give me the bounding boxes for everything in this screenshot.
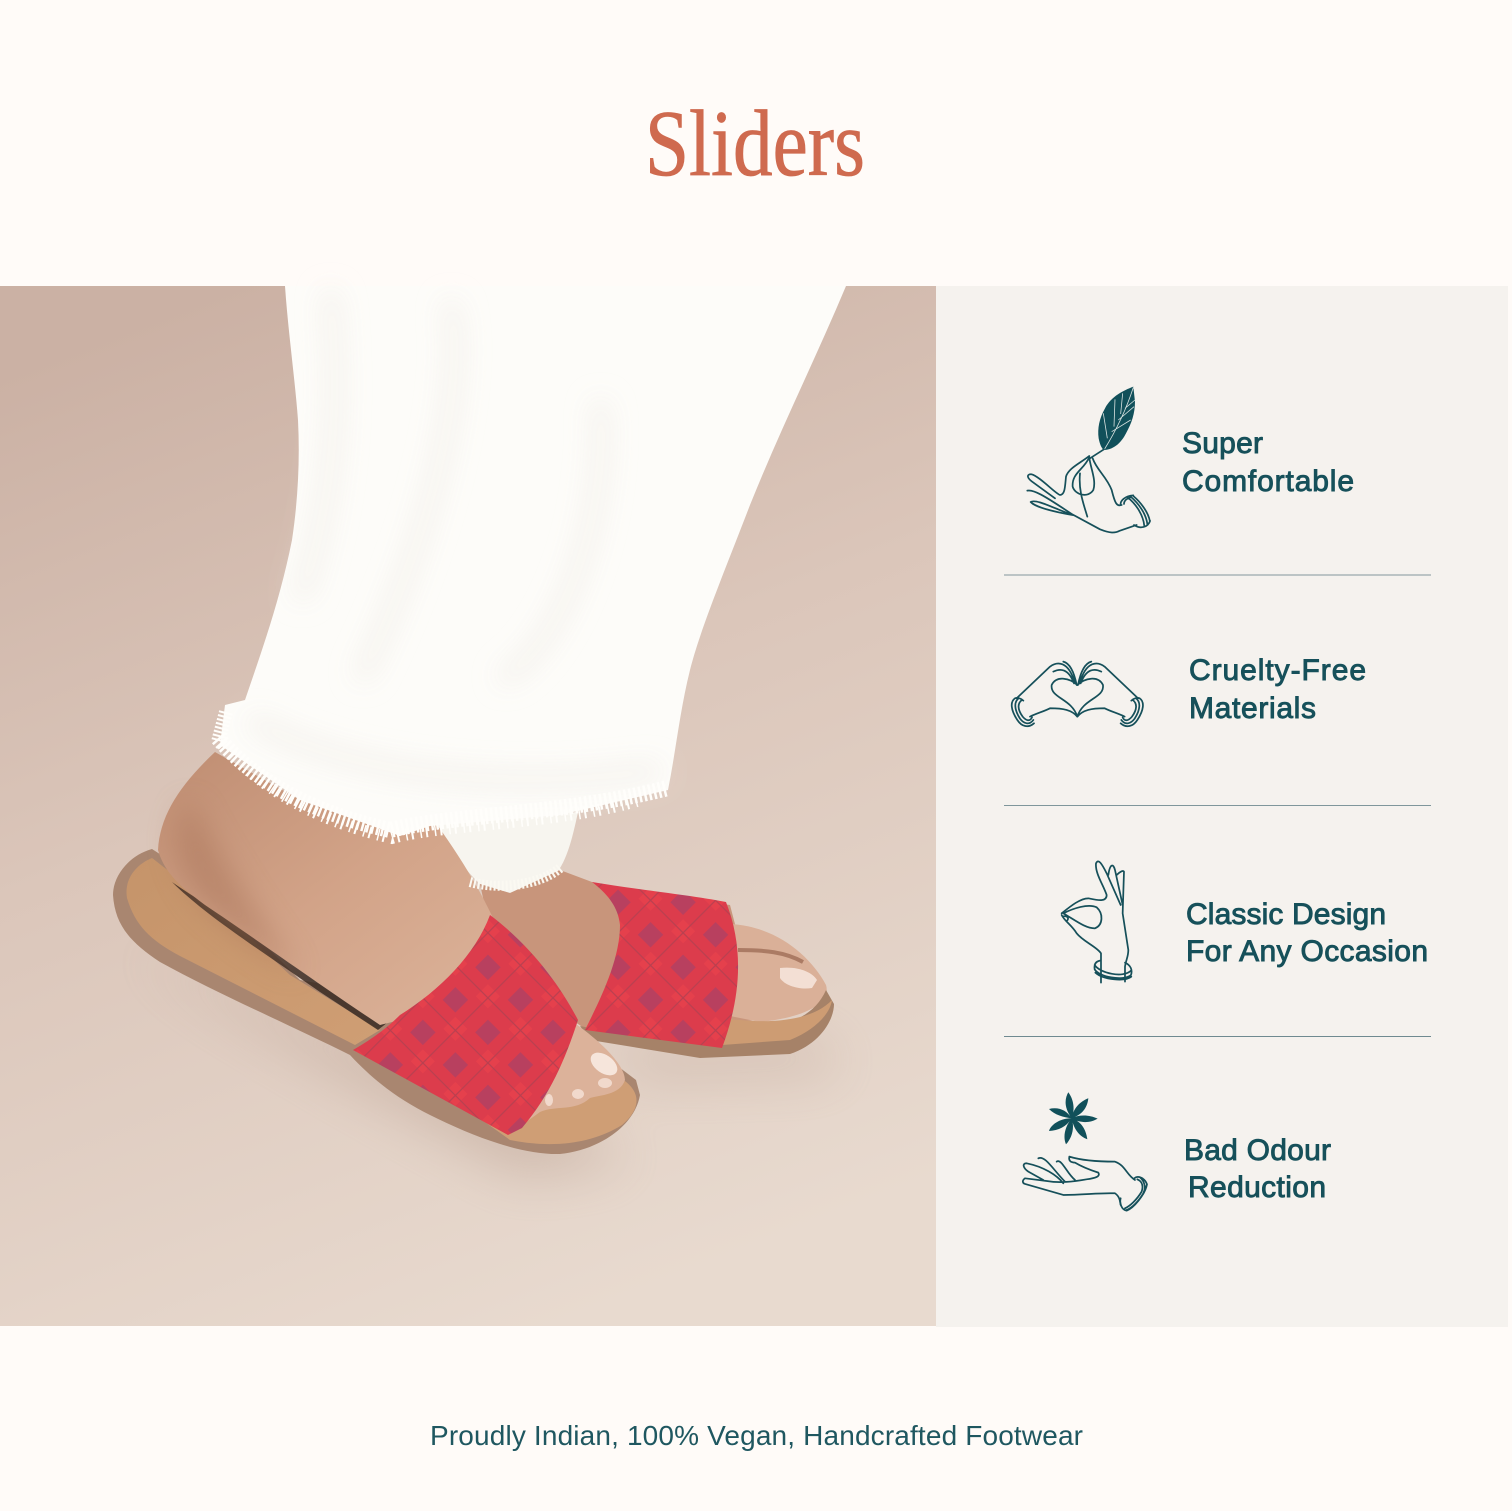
text: classic design (1186, 898, 1428, 968)
trouser fringe (218, 712, 668, 886)
front toes (515, 1020, 625, 1130)
title: Sliders (645, 92, 865, 196)
text: super comfortable: Super (1182, 427, 1263, 460)
text: classic design: Classic Design (1186, 898, 1386, 931)
front footbed (127, 858, 380, 1045)
icon: hand with flower (1023, 1092, 1147, 1211)
arch shadow (172, 882, 388, 1030)
text: cruelty-free materials: Materials (1189, 692, 1316, 725)
text: classic design: For Any Occasion (1186, 935, 1428, 968)
trouser (220, 286, 846, 836)
text: cruelty-free materials (1189, 654, 1366, 725)
text: bad odour (1184, 1134, 1331, 1204)
front sandal sole (113, 849, 640, 1154)
panel: features (936, 286, 1508, 1327)
back strap (585, 882, 738, 1048)
panel: product photo (0, 286, 936, 1326)
text: super comfortable (1182, 427, 1354, 498)
front leg skin (158, 752, 510, 1025)
text: cruelty-free materials: Cruelty-Free (1189, 654, 1366, 687)
text: bad odour: Bad Odour (1184, 1134, 1331, 1167)
text: bad odour: Reduction (1188, 1171, 1326, 1204)
icon: heart hands (1012, 662, 1143, 726)
footer tagline: Proudly Indian, 100% Vegan, Handcrafted Footwear (430, 1420, 1083, 1451)
back toes (730, 924, 827, 1022)
back foot skin (480, 870, 760, 1032)
icon: hand holding leaf (1027, 387, 1150, 533)
back leg trouser (436, 812, 578, 893)
text: super comfortable: Comfortable (1182, 465, 1354, 498)
back sandal sole (580, 990, 834, 1058)
icon: ok hand (1062, 861, 1132, 983)
floor shadow (130, 950, 840, 1175)
front strap (353, 915, 578, 1135)
